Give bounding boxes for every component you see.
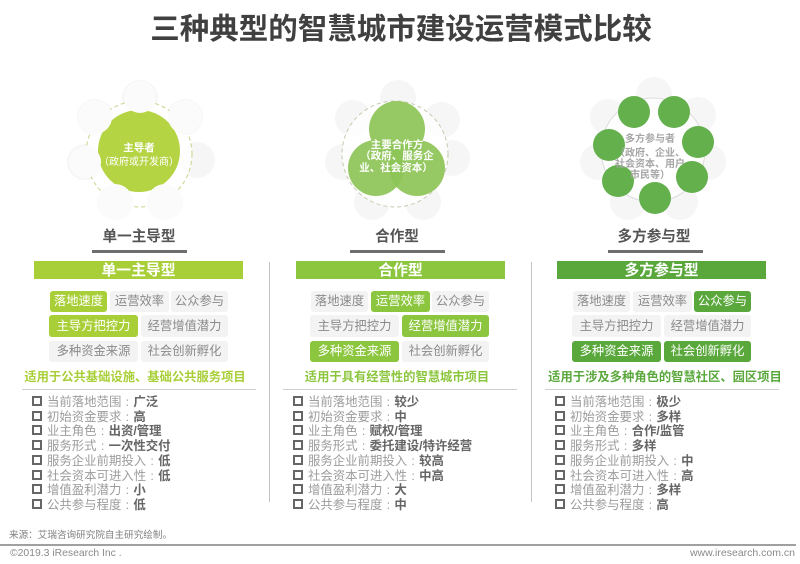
banner: [557, 261, 766, 279]
title: 三种典型的智慧城市建设运营模式比较: [150, 13, 652, 46]
panel: single-lead model: [22, 80, 256, 512]
attribute list: 业主角色 合作/监管: [570, 424, 685, 438]
tag: value-added potential: 经营增值潜力: [148, 319, 221, 333]
attribute list: :: [411, 469, 415, 483]
diagram: three overlapping circles: 主要合作方: [371, 138, 423, 151]
copyright: ©2019.3 iResearch Inc .: [10, 548, 122, 559]
attribute list: :: [126, 483, 129, 497]
applicable projects text: 适用于涉及多种角色的智慧社区、园区项目: [548, 370, 782, 384]
attribute list: :: [387, 498, 390, 512]
attribute list: :: [126, 395, 129, 409]
heading: model name: 单一主导型: [102, 229, 175, 245]
diagram: seven participant circles: （政府、企业、: [615, 146, 685, 159]
attribute list: :: [101, 439, 104, 453]
attribute list: :: [387, 483, 390, 497]
banner: 单一主导型: [102, 263, 176, 279]
tag: funding sources: [310, 341, 399, 362]
banner: [296, 261, 505, 279]
tag: operating efficiency: [110, 291, 169, 312]
attribute list: 公共参与程度 中: [308, 498, 407, 512]
attribute list: 公共参与程度 高: [570, 498, 669, 512]
attribute list: :: [150, 469, 154, 483]
tag: public participation: 公众参与: [175, 294, 224, 308]
attribute list: 增值盈利潜力 小: [47, 483, 146, 497]
attribute list: 当前落地范围 极少: [570, 395, 681, 409]
attribute list: :: [387, 410, 390, 424]
banner: [34, 261, 243, 279]
tag: public participation: [171, 291, 228, 312]
attribute list: 服务企业前期投入 较高: [308, 454, 444, 468]
tag: public participation: [432, 291, 489, 312]
attribute list: :: [150, 454, 154, 468]
diagram: three overlapping circles: 业、社会资本）: [359, 161, 433, 174]
attribute list: :: [387, 395, 390, 409]
tag: funding sources: [572, 341, 661, 362]
tag: funding sources: 多种资金来源: [580, 344, 653, 358]
panel: cooperation model: [283, 80, 517, 512]
tag: control: 主导方把控力: [580, 319, 653, 333]
tag: value-added potential: [402, 315, 489, 337]
tag: social innovation: 社会创新孵化: [148, 344, 221, 358]
attribute list: :: [126, 498, 129, 512]
heading: model name: 合作型: [375, 229, 419, 245]
diagram: seven participant circles: 社会资本、用户: [615, 157, 685, 170]
underline: [350, 250, 445, 253]
tag: control: 主导方把控力: [318, 319, 391, 333]
attribute list: :: [649, 395, 652, 409]
diagram: single lead circle: [67, 80, 215, 208]
attribute list: :: [362, 439, 365, 453]
tag: control: [310, 315, 399, 337]
diagram: single lead circle: （政府或开发商）: [99, 155, 179, 168]
attribute list: 初始资金要求 中: [308, 410, 407, 424]
tag: value-added potential: [141, 315, 228, 337]
attribute list: 服务形式 一次性交付: [47, 439, 171, 453]
tag: operating efficiency: 运营效率: [115, 294, 164, 308]
tag: public participation: 公众参与: [698, 294, 747, 308]
attribute list: 当前落地范围 较少: [308, 395, 419, 409]
banner: 多方参与型: [624, 263, 698, 279]
tag: control: [49, 315, 138, 337]
panel: multi-party model: [545, 77, 782, 512]
tag: funding sources: 多种资金来源: [318, 344, 391, 358]
attribute list: 增值盈利潜力 大: [308, 483, 407, 497]
attribute list: 初始资金要求 多样: [570, 410, 681, 424]
attribute list: :: [126, 410, 129, 424]
diagram: three overlapping circles: （政府、服务企: [360, 149, 434, 162]
website: www.iresearch.com.cn: [690, 547, 795, 559]
tag: social innovation: 社会创新孵化: [671, 344, 744, 358]
tag: landing speed: 落地速度: [577, 294, 626, 308]
tag: public participation: 公众参与: [436, 294, 485, 308]
heading: model name: 多方参与型: [618, 229, 690, 245]
attribute list: :: [362, 424, 365, 438]
source note: 来源：艾瑞咨询研究院自主研究绘制。: [9, 530, 172, 541]
attribute list: 初始资金要求 高: [47, 410, 146, 424]
attribute list: :: [673, 454, 677, 468]
applicable projects text: 适用于具有经营性的智慧城市项目: [305, 370, 489, 384]
divider: [545, 389, 779, 390]
tag: operating efficiency: [371, 291, 430, 312]
diagram: seven participant circles: [580, 77, 726, 220]
attribute list: 社会资本可进入性 中高: [308, 469, 444, 483]
tag: control: 主导方把控力: [57, 319, 130, 333]
underline: [608, 250, 703, 253]
attribute list: 社会资本可进入性 高: [570, 469, 694, 483]
banner: 合作型: [378, 263, 423, 279]
attribute list: :: [649, 498, 652, 512]
divider: [283, 389, 517, 390]
diagram: seven participant circles: 多方参与者: [625, 132, 675, 145]
diagram: three overlapping circles: [325, 80, 470, 220]
tag: value-added potential: 经营增值潜力: [409, 319, 482, 333]
tag: landing speed: 落地速度: [54, 294, 103, 308]
attribute list: 当前落地范围 广泛: [47, 395, 158, 409]
underline: [92, 250, 187, 253]
attribute list: 公共参与程度 低: [47, 498, 146, 512]
tag: operating efficiency: 运营效率: [376, 294, 425, 308]
tag: landing speed: [573, 291, 630, 312]
attribute list: :: [624, 424, 627, 438]
divider: [22, 389, 256, 390]
attribute list: :: [411, 454, 415, 468]
attribute list: 服务形式 委托建设/特许经营: [308, 439, 472, 453]
tag: social innovation: [141, 341, 228, 362]
attribute list: 服务企业前期投入 低: [47, 454, 171, 468]
tag: social innovation: [402, 341, 489, 362]
attribute list: :: [673, 469, 677, 483]
attribute list: 增值盈利潜力 多样: [570, 483, 681, 497]
diagram: seven participant circles: 市民等）: [630, 168, 670, 181]
attribute list: 服务企业前期投入 中: [570, 454, 694, 468]
tag: landing speed: 落地速度: [315, 294, 364, 308]
tag: public participation: [694, 291, 751, 312]
tag: landing speed: [311, 291, 368, 312]
attribute list: [555, 395, 694, 512]
attribute list: 社会资本可进入性 低: [47, 469, 171, 483]
attribute list: [293, 395, 472, 512]
tag: value-added potential: 经营增值潜力: [671, 319, 744, 333]
attribute list: :: [101, 424, 104, 438]
tag: landing speed: [50, 291, 107, 312]
attribute list: :: [649, 483, 652, 497]
tag: operating efficiency: 运营效率: [638, 294, 687, 308]
tag: funding sources: [49, 341, 138, 362]
tag: control: [572, 315, 661, 337]
attribute list: :: [649, 410, 652, 424]
tag: social innovation: 社会创新孵化: [409, 344, 482, 358]
tag: operating efficiency: [633, 291, 692, 312]
attribute list: 业主角色 出资/管理: [47, 424, 162, 438]
attribute list: 业主角色 赋权/管理: [308, 424, 423, 438]
attribute list: 服务形式 多样: [570, 439, 656, 453]
attribute list: :: [624, 439, 627, 453]
tag: value-added potential: [664, 315, 751, 337]
attribute list: [32, 395, 171, 512]
applicable projects text: 适用于公共基础设施、基础公共服务项目: [24, 370, 246, 384]
tag: social innovation: [664, 341, 751, 362]
diagram: single lead circle: 主导者: [123, 141, 155, 154]
tag: funding sources: 多种资金来源: [57, 344, 130, 358]
